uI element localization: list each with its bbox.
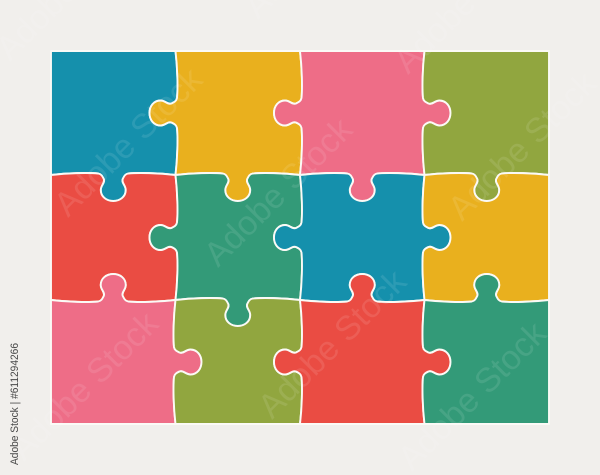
watermark: Adobe Stock	[47, 60, 211, 224]
piece: row 2 col 2 teal	[150, 173, 302, 326]
watermark: Adobe Stock	[251, 262, 415, 426]
piece: row 1 col 2 yellow	[150, 51, 302, 201]
stock id caption: Adobe Stock | #611294266	[9, 343, 21, 465]
piece: row 3 col 3 red	[274, 274, 450, 424]
piece: row 3 col 1 pink	[51, 274, 202, 424]
puzzle board	[51, 51, 549, 424]
watermark: Adobe Stock	[441, 64, 600, 228]
piece: row 1 col 4 olive	[422, 51, 549, 201]
piece: row 3 col 4 teal	[422, 274, 549, 424]
watermark: Adobe Stock	[197, 110, 361, 274]
piece: row 2 col 3 blue	[274, 173, 450, 302]
piece: row 3 col 2 olive	[174, 298, 302, 424]
piece: row 2 col 4 yellow	[422, 173, 549, 302]
piece: row 2 col 1 red	[51, 173, 178, 302]
piece: row 1 col 3 pink	[274, 51, 450, 201]
watermark: Adobe Stock	[391, 314, 555, 475]
piece: row 1 col 1 blue	[51, 51, 178, 201]
watermark: Adobe Stock	[3, 304, 167, 468]
